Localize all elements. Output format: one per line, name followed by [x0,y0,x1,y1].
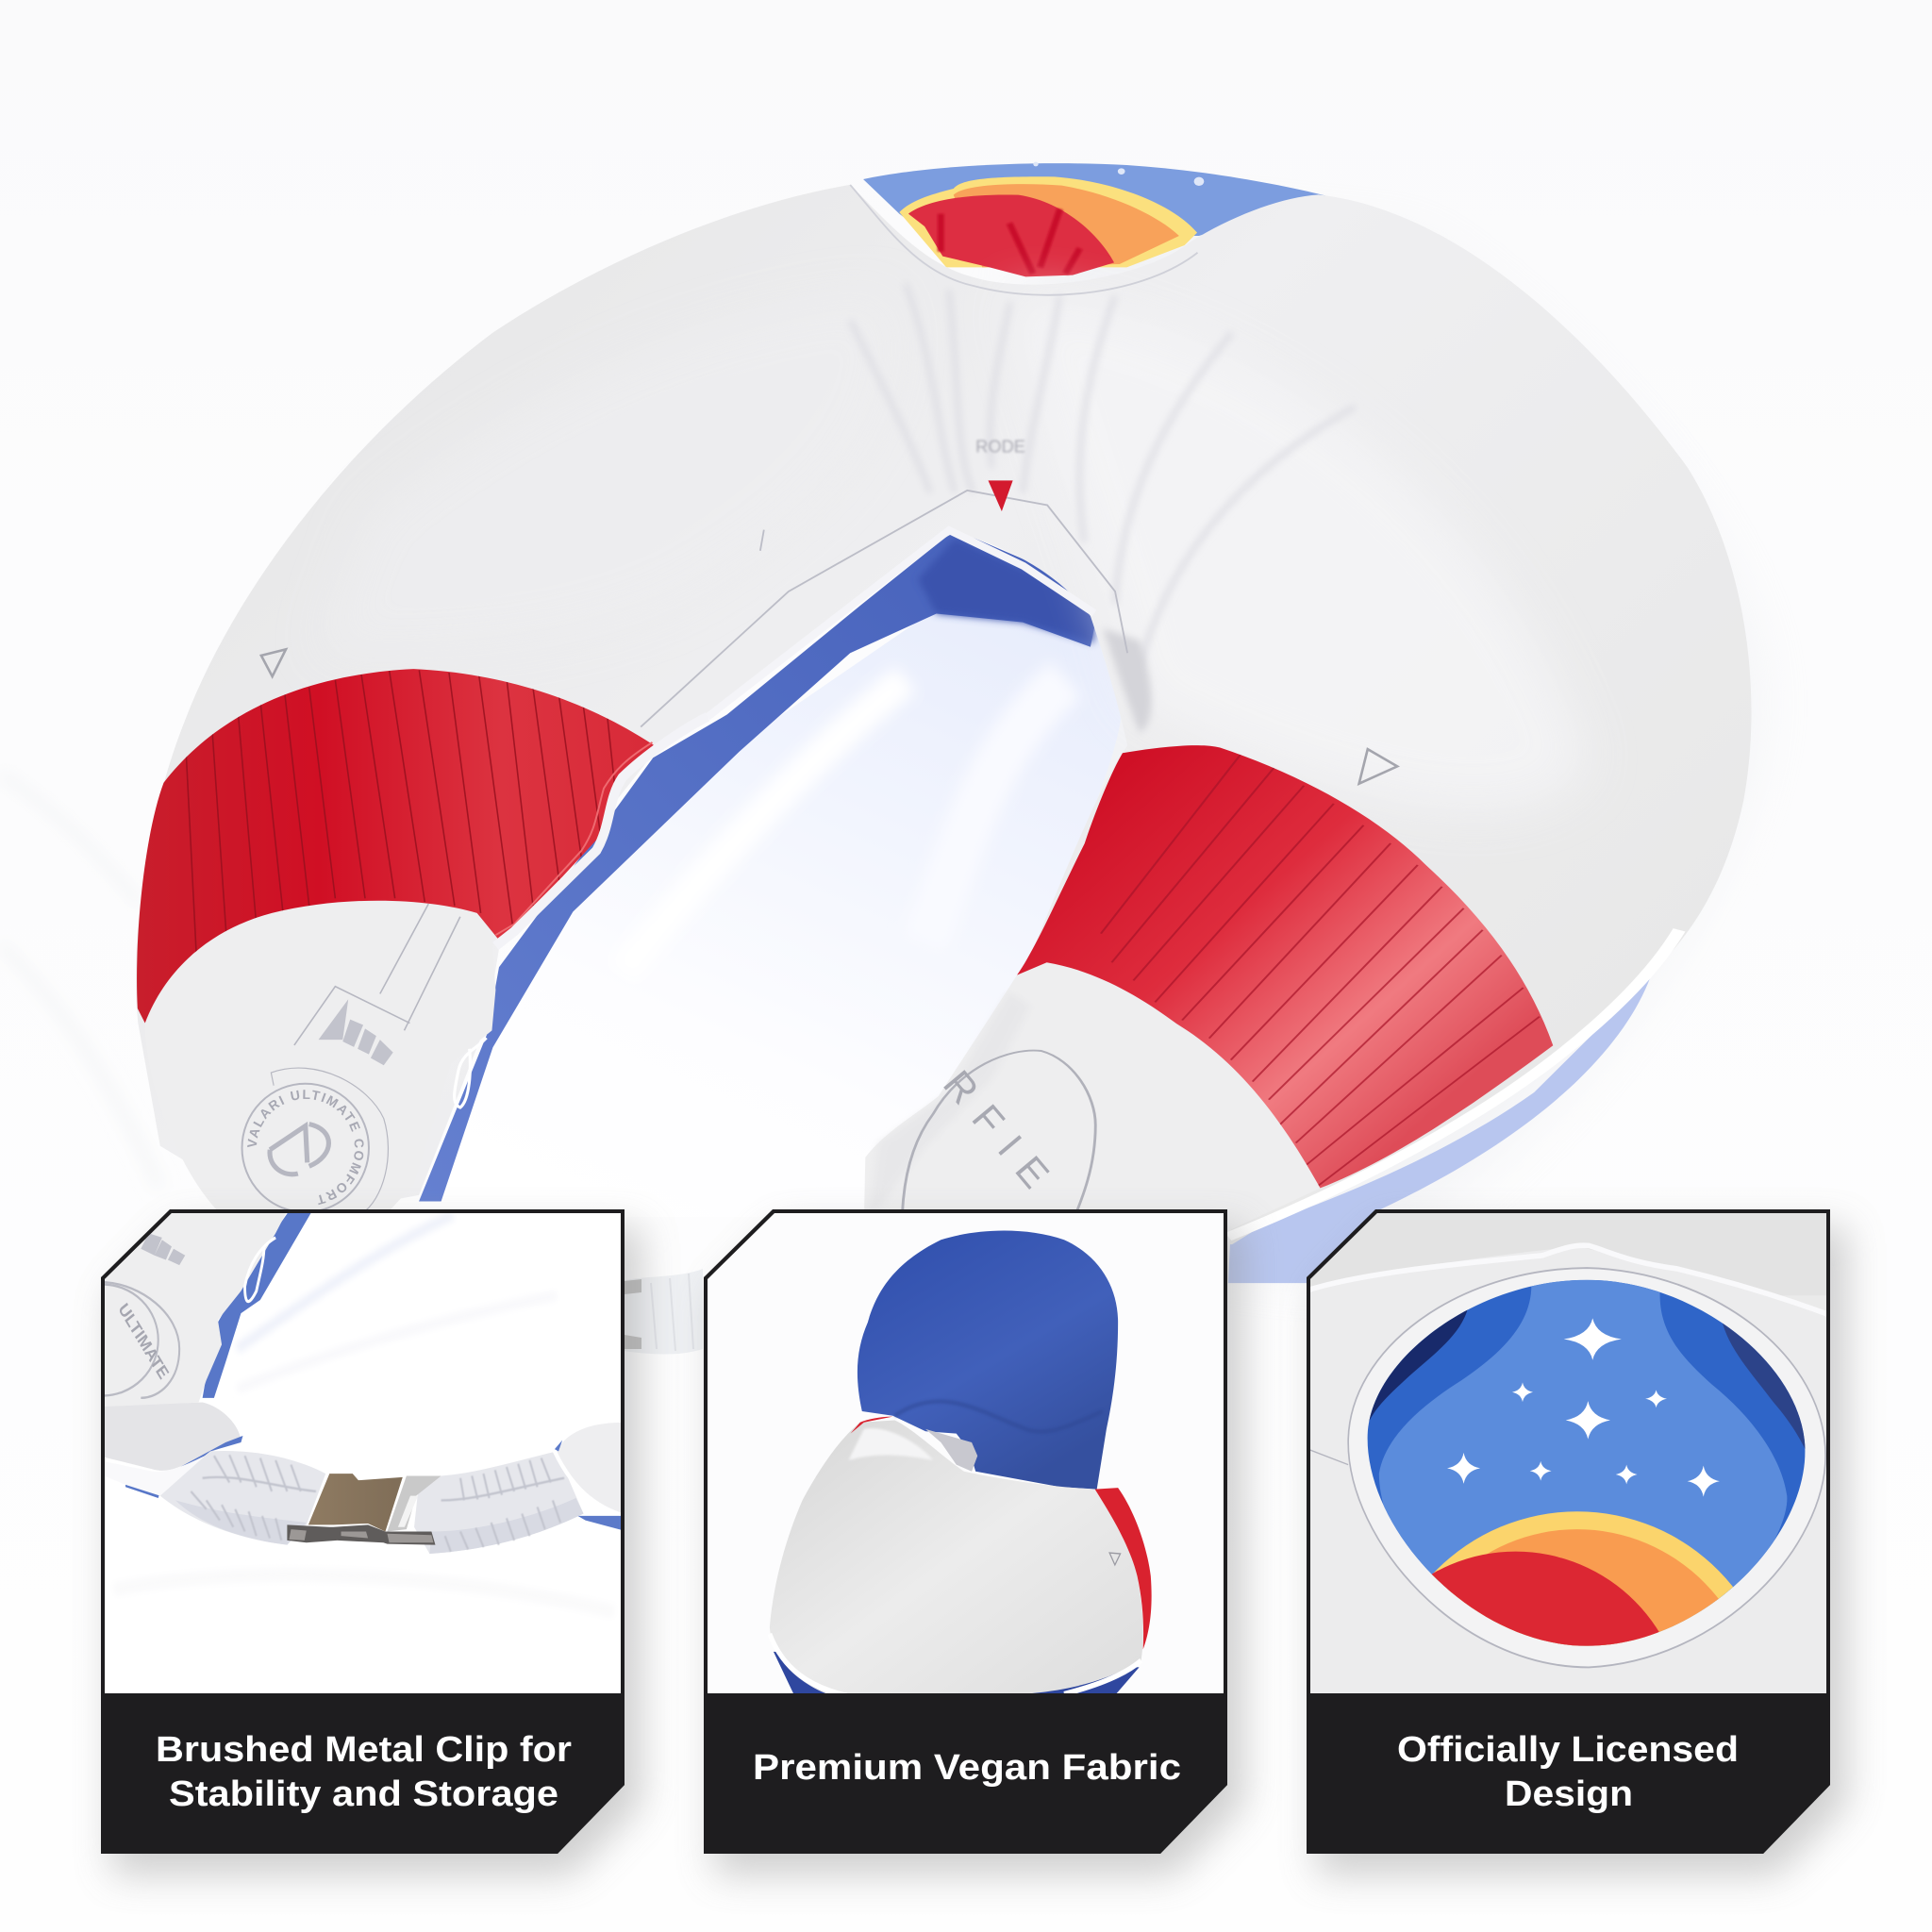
card: vegan fabric [698,1208,1244,1875]
starfield patch at the top [863,162,1325,276]
pillow end [98,1211,287,1409]
sunrise orange arc [1396,1529,1758,1899]
highlight on top of the ball [849,1428,933,1460]
soft pillow shadow [943,208,1756,1274]
blue base [774,1652,1140,1696]
shaded fold on right end [868,991,1030,1223]
badge lettering around logo: VALARI ULTIMATE COMFORT [247,1090,364,1206]
photo of starfield emblem [1292,1207,1840,1917]
right pillow end and red band [862,745,1679,1283]
red triangle marker [989,480,1013,511]
triangle marker right [1359,749,1397,784]
caption bar [1307,1693,1830,1854]
left pillow end and red band [137,669,708,1217]
blue lining [203,1211,312,1398]
white rounded body [770,1420,1143,1696]
card: metal clip [46,1208,641,1875]
logo stripes [319,999,393,1065]
red band [1095,1488,1152,1650]
card: licensed design [1292,1207,1847,1917]
pillow body [136,185,1752,1244]
card frame [1307,1209,1830,1854]
blue folded arm [858,1231,1118,1490]
right red band [1017,745,1553,1188]
zip seam along the inner edge [708,530,1094,717]
bed streaks [238,1213,453,1351]
caption bar [704,1693,1227,1854]
card shadow [1317,1226,1847,1875]
white zip seam beside red band [495,717,708,946]
light streaks in the opening [623,679,1066,972]
photo of folded pillow [698,1208,1236,1698]
left strap [160,1451,325,1545]
triangle marker left [261,649,286,676]
stars [1447,1318,1720,1497]
printed label near centre: RODE [975,436,1025,456]
buckle lower rail [287,1524,435,1545]
caption text: Officially Licensed [1397,1730,1739,1770]
light highlight on left arm [321,295,893,653]
fabric lump [98,1403,241,1471]
grey fabric top [1292,1207,1839,1295]
main pillow photo [104,162,1794,1392]
elastic strap in the gap between cards [623,1269,703,1355]
card frame [101,1209,625,1854]
deep crease by the right arm [1103,628,1152,733]
light blue centre [1379,1277,1787,1611]
right cap of pillow [555,1420,624,1516]
card frame [704,1209,1227,1854]
light highlight on right arm [1010,295,1590,811]
emblem white ring [1348,1268,1825,1667]
photo of buckle and strap [105,1213,621,1693]
caption text: Premium Vegan Fabric [753,1748,1181,1788]
centre opening of the pillow [415,585,1123,1217]
caption text [1397,1730,1739,1814]
fold crease [894,1402,1103,1432]
printed seam lines [641,185,1198,727]
seam tick [1307,1449,1348,1465]
gathered fabric folds at the centre [850,283,1356,665]
right strap [414,1451,584,1554]
buckle plate [308,1474,403,1531]
zipper pull [245,1238,275,1302]
caption bar [101,1693,625,1854]
left white end [145,901,495,1217]
left red band [137,669,658,1024]
caption text: Brushed Metal Clip for [156,1730,572,1770]
badge lettering RFIE: RFIE [935,1062,1068,1208]
printed circle badge [902,1051,1095,1283]
caption text [156,1730,572,1814]
zipper pull [455,1038,487,1108]
piping along the outer edge [1228,930,1679,1237]
card shadow [714,1226,1244,1875]
white fold [925,1429,977,1472]
starfield disc [1346,1269,1827,1917]
dark navy left [1350,1269,1470,1438]
right white end [862,962,1320,1283]
underside of the pillow [1228,977,1651,1283]
caption text: Stability and Storage [169,1774,558,1814]
logo badge on left end [242,904,460,1214]
card shadow [111,1226,641,1875]
blue fragment under lump [125,1436,242,1498]
buckle slot [387,1475,441,1531]
sunrise yellow arc [1377,1511,1777,1917]
pillow inner blue lining [419,530,1099,1201]
white seam [1307,1245,1831,1316]
dark navy right [1720,1308,1827,1456]
caption text: Design [1505,1774,1633,1814]
piping [770,1634,1141,1696]
concentric logo rings [105,1281,181,1399]
sunrise red arc [1346,1552,1685,1894]
triangle marker [1109,1553,1121,1565]
logo stripes [141,1233,185,1265]
logo lettering: ULTIMATE [115,1300,173,1383]
bed fabric wrinkles [0,774,160,1189]
fabric below the seam [1307,1246,1831,1696]
